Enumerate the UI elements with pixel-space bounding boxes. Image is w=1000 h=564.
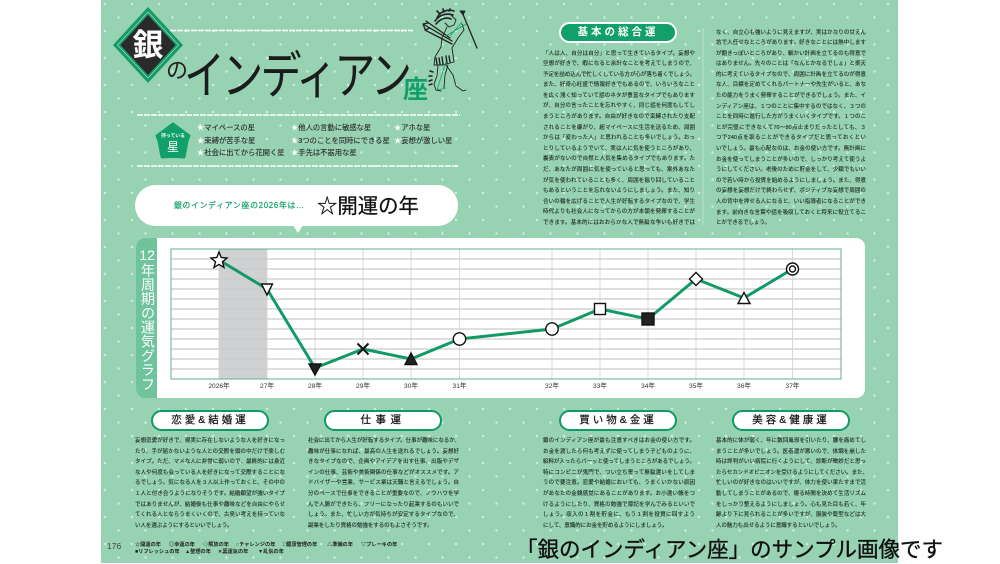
text block: shopping and money — [543, 436, 695, 529]
text block: beauty and health: をしっかり整えるようにしましょう。心も見た目も若く、年 — [716, 502, 866, 508]
text block: general fortune column 1: が気を使われていることも多く、周囲を振り回していること — [543, 178, 695, 184]
text block: general fortune column 2: うにしてください。老後のために貯金をして、少額でもいい — [716, 167, 866, 173]
text block: love and marriage: な人や何度も会っている人を好きになって交際することにな — [135, 470, 285, 476]
legend: fortune year symbols: □健康管理の年 — [283, 542, 317, 548]
heading pill: 仕事運 — [324, 410, 442, 431]
legend: fortune year symbols: ○チャレンジの年 — [236, 542, 275, 548]
text block: work: しょう。また、忙しい方が気持ちが安定するタイプなので、 — [308, 512, 459, 518]
legend: fortune year symbols: ▲整理の年 — [185, 548, 211, 554]
text block: general fortune column 1: とりしているようでいて、実は人に気を使うところがあり、 — [543, 146, 695, 152]
text block: work — [308, 436, 460, 529]
text block: general fortune column 1: を広く浅く知っていて話のネタが豊富なタイプでもあります — [543, 93, 695, 99]
text block: general fortune column 2: 的に考えているタイプなので、周囲に計画を立てるのが得意 — [716, 72, 866, 78]
speech bubble: 開運の年 — [135, 185, 458, 233]
stars list: ★束縛が苦手な星 — [197, 136, 255, 145]
text block: general fortune column 1: 裏表がないので自然と人気を集めるタイプでもあります。た — [543, 156, 695, 162]
heading pill: 買い物&金運: 買い物&金運 — [579, 414, 657, 426]
title: のインディアン座: 座 — [403, 76, 428, 104]
text block: shopping and money: うので要注意。恋愛や結婚においても、うまくいかない原因 — [543, 480, 695, 486]
stars list: ★3つのことを同時にできる星 — [291, 136, 390, 145]
text block: beauty and health: まうことが多いでしょう。医者運が悪いので、体調を崩した — [716, 449, 866, 455]
heading pill: 仕事運: 仕事運 — [360, 414, 406, 426]
text block: work: 趣味が仕事になれば、最高の人生を送れるでしょう。妄想好 — [308, 449, 459, 455]
text block: general fortune column 2: の妄想を妄想だけで終わらせず、ポジティブな妄想で周囲の — [716, 188, 866, 194]
text block: general fortune column 2: はありません。先々のことは「なんとかなるでしょ」と楽天 — [716, 61, 866, 67]
text block: shopping and money: しょう。収入の１割を貯金に、もう１割を投資に回すよう — [543, 512, 695, 518]
text block: general fortune column 1: また、好奇心旺盛で情報好きでもあるので、いろいろなこと — [543, 82, 695, 88]
chart panel: 12-year fortune graph: 29年 — [356, 381, 370, 390]
text block: shopping and money: 銀のインディアン座が最も注意すべきはお金の使い方です。 — [543, 438, 695, 444]
heading pill: 恋愛&結婚運 — [151, 410, 269, 431]
heading pill: 買い物&金運 — [559, 410, 677, 431]
text block: general fortune column 1: まうところがあります。自由が好きなので束縛されたり支配 — [543, 114, 695, 120]
title: のインディアン座: の — [166, 58, 188, 83]
text block: love and marriage: 妄想恋愛が好きで、現実に存在しないような人を好きになっ — [135, 438, 285, 444]
text block: general fortune column 1: できます。基本的にはおおらかな人で無駄な争いも好きでは — [543, 220, 695, 226]
text block: general fortune column 1 — [543, 50, 695, 226]
legend: fortune year symbols: ▽ブレーキの年 — [361, 542, 397, 548]
stars list: ★社会に出てから花開く星 — [197, 148, 285, 157]
text block: beauty and health: たらセカンドオピニオンを受けるようにしてください。また、 — [716, 470, 868, 476]
text block: general fortune column 2: が飽きっぽいところがあり、細かい計画を立てるのも得意で — [716, 51, 866, 57]
text block: work: ドバイザーや営業、サービス業は天職と言えるでしょう。自 — [308, 480, 459, 486]
chart panel: 12-year fortune graph — [136, 238, 865, 398]
text block: beauty and health: 動してしまうことがあるので、寝る時間を決めて生活リズム — [716, 491, 866, 497]
chart panel: 12-year fortune graph: 28年 — [308, 381, 322, 390]
badge: 持っている星 — [156, 122, 190, 158]
badge: 持っている星: 持っている — [161, 132, 185, 139]
text block: general fortune column 2 — [716, 28, 866, 226]
text block: general fortune column 1: 空想が好きで、暇になると余計なことを考えてしまうので、 — [543, 61, 695, 67]
text block: work: きなタイプなので、企画やアイデアを出す仕事、出版やデザ — [308, 459, 459, 465]
text block: love and marriage: ではありませんが、結婚後も仕事や趣味などを自由にやらせ — [135, 502, 285, 508]
text block: general fortune column 1: からは「変わった人」と思われることも多いでしょう。おっ — [543, 135, 695, 141]
text block: general fortune column 1: 合いの輪を広げることで人生が好転するタイプなので、学生 — [543, 199, 695, 205]
text block: general fortune column 2: ので若い時から投資を始めるようにしましょう。また、得意 — [716, 178, 866, 184]
text block: general fortune column 2: つで240点を取ることができるタイプだと思っておくとい — [716, 135, 866, 141]
text block: shopping and money: にして、意識的にお金を貯めるようにしましょう。 — [543, 523, 667, 529]
text block: love and marriage: るでしょう。気になる人を３人以上作っておくと、その中の — [135, 480, 285, 486]
chart panel: 12-year fortune graph: 30年 — [404, 381, 418, 390]
stars list: ★マイペースの星 — [197, 123, 255, 132]
title: のインディアン座: インディアン — [184, 47, 409, 105]
heading pill: 基本の総合運: 基本の総合運 — [578, 26, 658, 38]
text block: beauty and health: 基本的に体が弱く、年に数回風邪を引いたり、腰を痛めてし — [716, 438, 866, 444]
page number: 176 — [107, 541, 121, 551]
chart panel: 12-year fortune graph: 36年 — [737, 381, 751, 390]
text block: shopping and money: 給料が入ったらパーッと使ってしまうところがあるでしょう。 — [543, 459, 695, 465]
text block: beauty and health: 人の魅力も出せるように意識するといいでしょう。 — [716, 523, 841, 529]
text block: general fortune column 2: お金を使ってしまうことが多いので、しっかり考えて使うよ — [716, 157, 866, 163]
text block: general fortune column 1: だ、あなたが周囲に気を使っていると思っても、案外あなた — [543, 167, 695, 173]
text block: general fortune column 2: 人の背中を押せる人になると、いい指導者になることができ — [716, 199, 866, 205]
text block: beauty and health: 忙しいのが好きなのはいいですが、体力を使い果たすまで活 — [716, 480, 866, 486]
text block: general fortune column 2: なく、自立心も強いように見えますが、実はかなりの甘えん — [716, 30, 866, 36]
text block: general fortune column 2: とが完璧にできなくて70～80点止まりだったとしても、３ — [716, 125, 866, 131]
text block: general fortune column 2: 坊で人任せなところがあります。好きなことには熱中します — [716, 40, 866, 46]
heading pill: 恋愛&結婚運: 恋愛&結婚運 — [171, 414, 249, 426]
illustration: Indian archer — [422, 8, 478, 92]
badge: 持っている星: 星 — [167, 140, 179, 154]
text block: beauty and health: 齢より下に見られることが多いですが、服装や髪型などは大 — [716, 512, 866, 518]
text block: beauty and health — [716, 436, 868, 529]
chart panel: 12-year fortune graph: 35年 — [689, 381, 703, 390]
text block: love and marriage: タイプ。ただ、マメな人に非常に弱いので、最終的には身近 — [135, 459, 285, 465]
chart panel: 12-year fortune graph: 34年 — [641, 381, 655, 390]
text block: shopping and money: けるようにしたり、資格の勉強で簿記を学んでみるといいで — [543, 502, 695, 508]
text block: work: インの仕事、芸術や美術関係の仕事などがオススメです。ア — [308, 470, 459, 476]
text block: general fortune column 2: ます。前向きな言葉や話を吸収しておくと将来に役立てるこ — [716, 210, 866, 216]
text block: general fortune column 2: とができるでしょう。 — [716, 220, 770, 226]
text block: love and marriage: てくれる人とならうまくいくので、古臭い考えを持っていな — [135, 512, 285, 518]
text block: work: んで人脈ができたら、フリーになったり起業するのもいいで — [308, 502, 459, 508]
text block: shopping and money: お金を渡したら何も考えずに使ってしまう子どものように、 — [543, 449, 695, 455]
legend: fortune year symbols: ■リフレッシュの年 — [135, 548, 180, 554]
speech bubble: 開運の年: 銀のインディアン座の2026年は… — [174, 201, 305, 210]
stars list: ★他人の言動に敏感な星 — [291, 123, 371, 132]
text block: work: 社会に出てから人生が好転するタイプ。仕事が趣味になるか、 — [308, 438, 460, 444]
text block: work: 分のペースで仕事をできることが重要なので、ノウハウを学 — [308, 491, 459, 497]
text block: general fortune column 1: もあるということを忘れないようにしましょう。また、知り — [543, 188, 695, 194]
stars list: ★手先は不器用な星 — [291, 148, 357, 157]
legend: fortune year symbols: ◎幸運の年 — [169, 542, 195, 548]
text block: shopping and money: 特にコンビニが鬼門で、つい立ち寄って無駄遣いをしてしま — [543, 470, 695, 476]
chart panel: 12-year fortune graph: 2026年 — [208, 381, 230, 390]
icon: silver diamond badge: 銀 — [132, 28, 164, 63]
chart panel: 12-year fortune graph: 32年 — [545, 381, 559, 390]
heading pill: 美容&健康運 — [732, 410, 850, 431]
text block: love and marriage — [135, 436, 285, 529]
chart panel: 12-year fortune graph: 31年 — [453, 381, 467, 390]
text block: general fortune column 1: 時代よりも社会人になってからの方が本領を発揮することが — [543, 209, 695, 215]
stars list — [197, 123, 452, 157]
text block: beauty and health: 時は評判がいい病院に行くようにして、診断が微妙だと思っ — [716, 459, 866, 465]
text block: love and marriage: たり、手が届かないような人との交際を頭の中だけで楽しむ — [135, 449, 285, 455]
text block: general fortune column 2: な人、目標を定めてくれるパートナーや先生がいると、あな — [716, 82, 866, 88]
text block: work: 副業をしたり資格の勉強をするのもよさそうです。 — [308, 523, 433, 529]
chart panel: 12-year fortune graph: 27年 — [260, 381, 274, 390]
chart panel: 12-year fortune graph: 37年 — [786, 381, 800, 390]
icon: silver diamond badge — [113, 7, 183, 83]
text block: general fortune column 1: されることを嫌がり、超マイペースに生活を送るため、周囲 — [543, 125, 695, 131]
text block: general fortune column 2: たの能力をうまく発揮することができるでしょう。また、イ — [716, 93, 866, 99]
text block: shopping and money: があなたの金銭感覚にあることがあります。お小遣い帳をつ — [543, 491, 695, 497]
text block: general fortune column 2: ことを同時に進行した方がうまくいくタイプです。１つのこ — [716, 114, 866, 120]
text block: general fortune column 1: 予定を詰め込んで忙しくしている方が心が落ち着くでしょう。 — [543, 72, 695, 78]
legend: fortune year symbols: ☆開運の年 — [135, 542, 161, 548]
legend: fortune year symbols: △準備の年 — [327, 542, 353, 548]
chart label: 12年周期の運気グラフ: 12 年周期の運気グラフ — [139, 249, 155, 391]
text block: love and marriage: い人を選ぶようにするといいでしょう。 — [135, 523, 232, 529]
legend: fortune year symbols: ◇解放の年 — [203, 542, 229, 548]
legend: fortune year symbols: ▼乱気の年 — [258, 548, 284, 554]
stars list: ★妄想が激しい星 — [394, 136, 452, 145]
text block: love and marriage: １人と付き合うようになりそうです。結婚願望が強いタイプ — [135, 491, 285, 497]
text block: general fortune column 1: が、自分の言ったことを忘れやすく、同じ話を何度もしてし — [543, 103, 695, 109]
stars list: ★アホな星 — [394, 123, 430, 132]
caption: sample image notice: 「銀のインディアン座」のサンプル画像です — [516, 538, 943, 562]
heading pill: 美容&健康運: 美容&健康運 — [752, 414, 830, 426]
text block: general fortune column 1: 「人は人、自分は自分」と思って生きているタイプ。妄想や — [543, 50, 695, 56]
page background panel — [101, 0, 898, 563]
chart panel: 12-year fortune graph: 33年 — [593, 381, 607, 390]
heading pill: 基本の総合運 — [559, 22, 677, 43]
legend: fortune year symbols: ✕裏運気の年 — [218, 548, 248, 554]
speech bubble: 開運の年: ☆開運の年 — [317, 196, 419, 218]
legend: fortune year symbols — [135, 541, 398, 554]
text block: general fortune column 2: ンディアン座は、１つのことに集中するのではなく、３つの — [716, 104, 866, 110]
text block: general fortune column 2: いでしょう。最も心配なのは、お金の使い方です。無計画に — [716, 146, 866, 152]
